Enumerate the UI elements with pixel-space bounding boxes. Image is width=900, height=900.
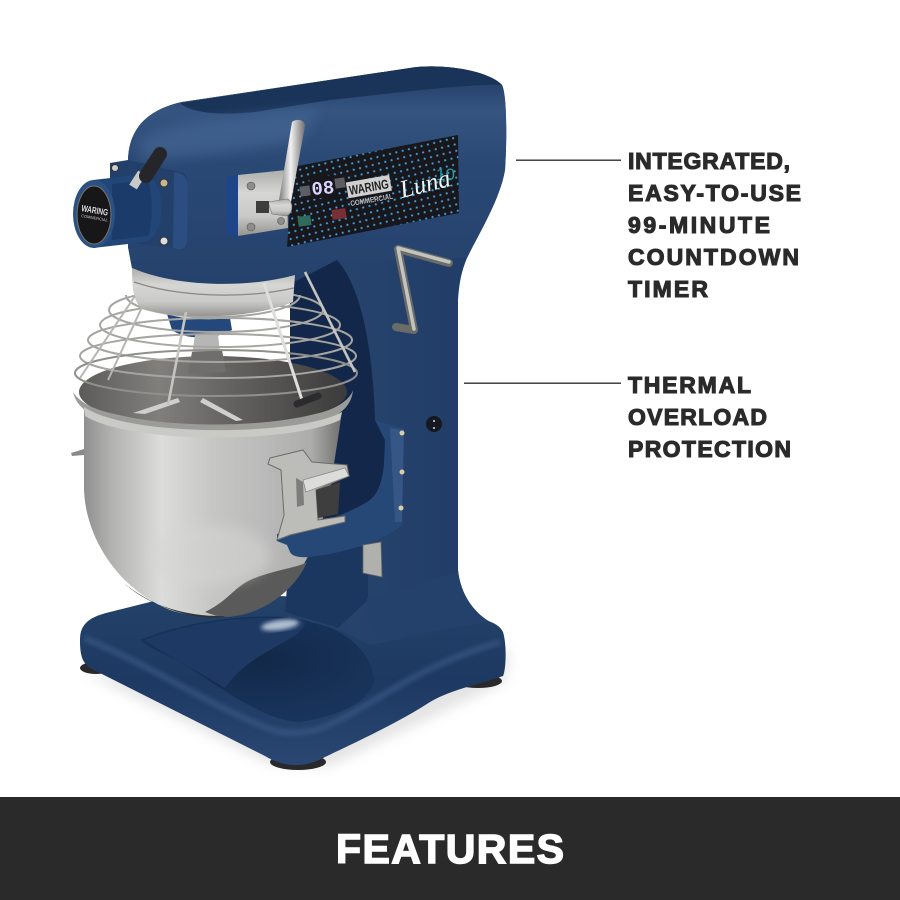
hub cap [73,180,115,248]
callout text: 99-MINUTE [628,212,770,238]
head highlight [140,108,320,160]
wire bowl guard rings [75,288,357,396]
mixing bowl [71,390,353,618]
footer title: FEATURES [336,826,564,872]
tray rear ramp [145,618,305,688]
tray reflection [260,617,300,633]
mixer column and head [128,66,506,645]
footer banner [0,797,900,900]
mixer base [80,592,506,765]
mixer feet [80,662,502,770]
column switch [426,416,442,432]
bowl support arm [277,420,404,557]
bowl rim [73,390,353,433]
timer readout [309,175,337,199]
column dark arch [290,260,385,540]
callout text [628,372,791,462]
brand badge [346,175,394,208]
callout text: EASY-TO-USE [628,180,801,206]
timer panel: 08 [311,177,335,201]
bowl clamp [268,450,349,540]
attachment hub [73,154,188,249]
guard latch [297,396,318,404]
Luna script: Luna [396,165,453,204]
icon: stand mixer product illustration [71,66,510,770]
brand badge: COMMERCIAL [350,192,394,208]
base shadow [84,650,510,766]
brand badge: WARING [348,176,390,198]
bowl bottom reflection [205,562,307,617]
timer panel [287,135,459,247]
bowl interior [79,356,347,428]
wire guard uprights [80,272,355,405]
leader line [516,160,621,161]
guide slot [363,542,382,577]
planetary shaft [133,314,243,421]
gear collar [132,268,295,316]
status lights [297,215,312,227]
lever stem and knob [279,120,305,202]
callout text: THERMAL [628,372,751,398]
lower column step [367,570,490,640]
base tray recess [140,617,374,722]
head shell [128,66,506,287]
speed lever plate [226,120,305,236]
bowl side tab [71,449,84,456]
head top plane [180,66,502,114]
callout: countdown timer [516,148,801,302]
lower column shadow behind bowl [285,545,368,628]
attachment hub: COMMERCIAL [81,213,109,223]
hub logo: WARING [81,203,109,218]
callout text: TIMER [628,276,708,302]
timer up and down buttons [299,177,346,197]
beater blades [133,398,243,421]
bowl lift crank [396,248,449,330]
callout: thermal overload protection [464,372,791,462]
base front edge highlight [84,638,500,733]
callout text: INTEGRATED, [628,148,790,174]
callout text: OVERLOAD [628,404,767,430]
leader line [464,382,621,384]
callout text [628,148,801,302]
panel model number: 10 [436,165,455,184]
callout text: COUNTDOWN [628,244,799,270]
callout text: PROTECTION [628,436,791,462]
hub knob [133,173,142,187]
